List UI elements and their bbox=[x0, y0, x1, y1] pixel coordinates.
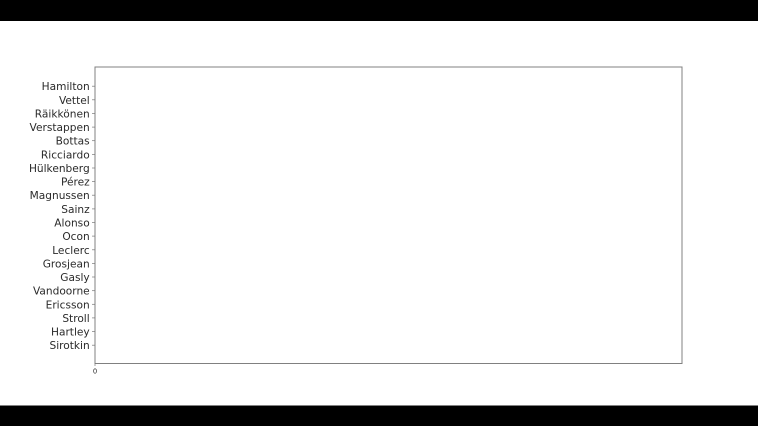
driver name labels: Ricciardo bbox=[41, 149, 90, 161]
driver name labels: Magnussen bbox=[30, 190, 90, 202]
x axis zero tick: 0 bbox=[93, 368, 97, 376]
driver name labels: Grosjean bbox=[43, 258, 90, 270]
driver name labels bbox=[29, 81, 90, 352]
x axis zero tick bbox=[93, 364, 97, 376]
driver name labels: Vandoorne bbox=[33, 286, 90, 298]
driver name labels: Hamilton bbox=[42, 81, 90, 93]
driver name labels: Alonso bbox=[54, 218, 90, 230]
driver name labels: Ocon bbox=[62, 231, 90, 243]
driver name labels: Räikkönen bbox=[35, 108, 90, 120]
bottom letterbox bar bbox=[0, 406, 758, 426]
driver name labels: Sirotkin bbox=[49, 340, 90, 352]
driver name labels: Pérez bbox=[61, 177, 90, 189]
y axis tick marks bbox=[92, 86, 95, 345]
plot area frame bbox=[95, 67, 682, 364]
driver name labels: Leclerc bbox=[52, 245, 90, 257]
chart: empty bar chart race frame bbox=[29, 67, 682, 376]
driver name labels: Verstappen bbox=[30, 122, 90, 134]
driver name labels: Gasly bbox=[60, 272, 90, 284]
driver name labels: Bottas bbox=[56, 136, 90, 148]
driver name labels: Hartley bbox=[51, 327, 90, 339]
driver name labels: Hülkenberg bbox=[29, 163, 90, 175]
driver name labels: Stroll bbox=[62, 313, 90, 325]
driver name labels: Vettel bbox=[59, 95, 90, 107]
driver name labels: Ericsson bbox=[46, 299, 90, 311]
driver name labels: Sainz bbox=[61, 204, 90, 216]
top letterbox bar bbox=[0, 0, 758, 21]
